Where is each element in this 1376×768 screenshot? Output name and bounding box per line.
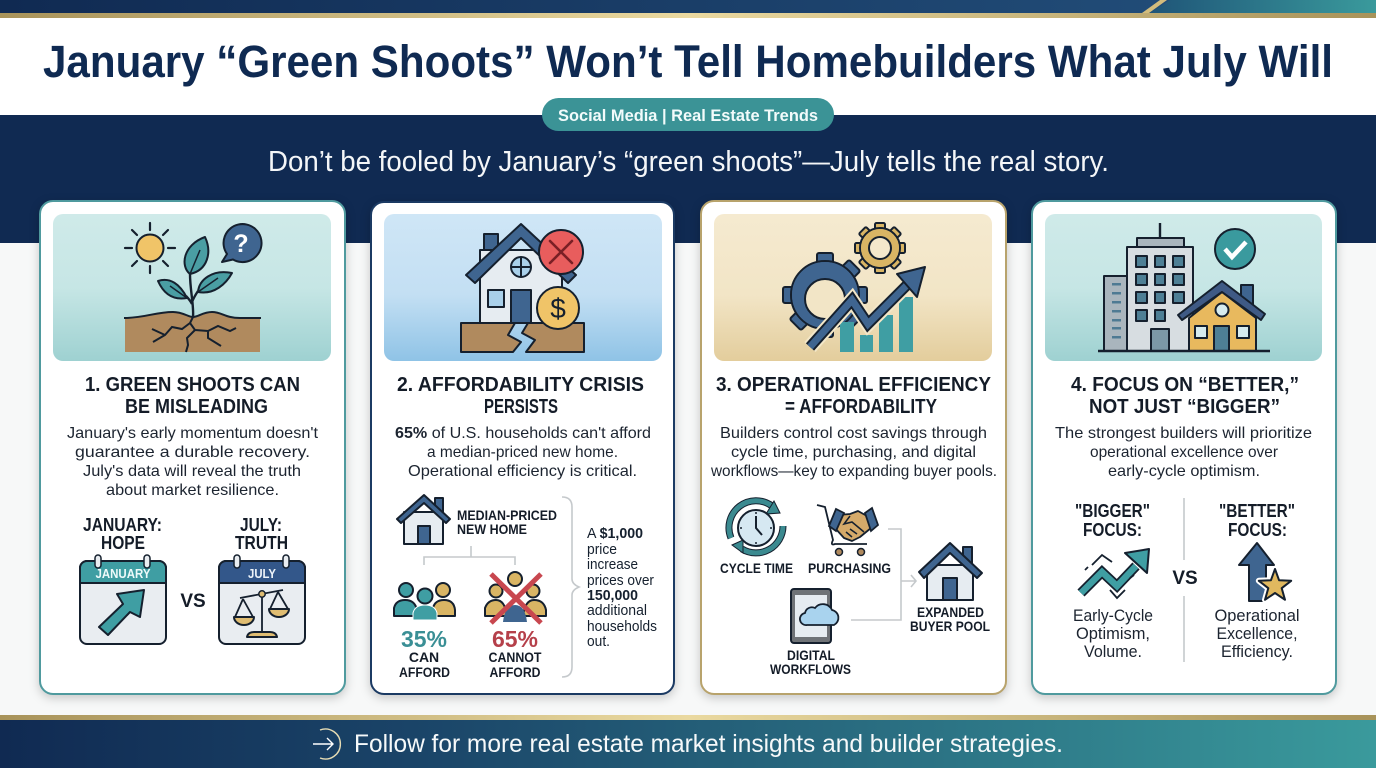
icon: july calendar with scales (219, 555, 305, 644)
panel: card 2 affordability crisis (371, 202, 674, 694)
stat: 65% cannot afford (488, 626, 542, 680)
body text (395, 425, 651, 480)
label: expanded buyer pool: BUYER POOL (910, 618, 990, 634)
label: bigger focus (1075, 501, 1150, 540)
icon: people who cannot afford (485, 572, 546, 623)
heading (716, 373, 991, 418)
label: median-priced new home: MEDIAN-PRICED (457, 507, 557, 523)
heading (1071, 373, 1299, 418)
category pill: Social Media | Real Estate Trends (558, 107, 818, 125)
label: median-priced new home: NEW HOME (457, 521, 527, 537)
callout: price increase: households (587, 619, 657, 635)
panel: card 4 better not bigger (1032, 201, 1336, 694)
label: expanded buyer pool (910, 604, 990, 634)
stat: 35% can afford: CAN (409, 649, 439, 665)
text: better focus description: Excellence, (1216, 624, 1298, 643)
callout: price increase: A $1,000 (587, 526, 643, 542)
label: better focus: FOCUS: (1228, 520, 1287, 540)
label: median-priced new home (457, 507, 557, 537)
vs label: VS (1172, 568, 1198, 589)
divider (1183, 498, 1185, 662)
heading (85, 373, 300, 418)
icon: january calendar: JANUARY (96, 567, 151, 581)
heading: = AFFORDABILITY (785, 395, 937, 418)
label: january hope: HOPE (101, 533, 145, 553)
icon: gears with rising arrow and bars (783, 223, 925, 352)
heading: BE MISLEADING (125, 395, 268, 418)
vs label: VS (180, 591, 206, 612)
callout: price increase: out. (587, 634, 610, 650)
icon: purchasing handshake and cart (817, 505, 878, 556)
icon: july calendar with scales: JULY (248, 567, 277, 581)
label: january hope: JANUARY: (83, 515, 162, 535)
label: better focus (1219, 501, 1295, 540)
heading: 1. GREEN SHOOTS CAN (85, 373, 300, 396)
label: better focus: "BETTER" (1219, 501, 1295, 521)
icon: people who can afford (394, 583, 455, 620)
stat: 35% can afford: AFFORD (399, 664, 450, 680)
heading: PERSISTS (484, 395, 558, 418)
text: bigger focus description: Optimism, (1076, 624, 1150, 643)
body text: January's early momentum doesn't (67, 425, 319, 442)
icon: sprout in cracked soil with sun and question: ? (233, 230, 249, 258)
subtitle: Don’t be fooled by January’s “green shoots”—July tells the real story. (268, 146, 1109, 178)
stat: 65% cannot afford: AFFORD (490, 664, 540, 680)
icon: cracked house with x and dollar (461, 224, 584, 352)
body text (67, 425, 319, 499)
body text (1055, 425, 1312, 480)
label: cycle time: CYCLE TIME (720, 560, 793, 576)
text: better focus description: Efficiency. (1221, 642, 1293, 661)
callout: price increase: additional (587, 603, 647, 619)
label: bigger focus: FOCUS: (1083, 520, 1142, 540)
icon: cycle time clock (729, 501, 783, 553)
brace (562, 497, 579, 677)
body text: about market resilience. (106, 482, 279, 499)
body text: The strongest builders will prioritize (1055, 425, 1312, 442)
label: digital workflows: DIGITAL (787, 647, 835, 663)
panel: card 3 operational efficiency (701, 201, 1006, 694)
callout: price increase: prices over (587, 573, 654, 589)
top banner (0, 0, 1376, 18)
body text: operational excellence over (1090, 444, 1279, 461)
heading: 4. FOCUS ON “BETTER,” (1071, 373, 1299, 396)
callout: price increase (587, 526, 657, 650)
stat: 35% can afford (399, 626, 450, 680)
stat: 35% can afford: 35% (401, 626, 447, 652)
icon: january calendar (80, 555, 166, 644)
text: bigger focus description: Volume. (1084, 642, 1142, 661)
label: expanded buyer pool: EXPANDED (917, 604, 984, 620)
heading (397, 373, 644, 418)
body text: 65% of U.S. households can't afford (395, 425, 651, 442)
text: bigger focus description (1073, 606, 1153, 661)
label: purchasing: PURCHASING (808, 560, 891, 576)
icon: zigzag growth arrow (1081, 549, 1149, 598)
label: july truth (235, 515, 288, 553)
stat: 65% cannot afford: CANNOT (488, 649, 542, 665)
icon: cracked house with x and dollar: $ (550, 293, 566, 324)
call to action: Follow for more real estate market insights and builder strategies. (354, 730, 1063, 758)
text: better focus description: Operational (1214, 606, 1300, 625)
icon: sprout in cracked soil with sun and question (124, 223, 262, 352)
callout: price increase: 150,000 (587, 588, 638, 604)
panel: card 1 green shoots (40, 201, 345, 694)
label: july truth: JULY: (240, 515, 282, 535)
heading: 2. AFFORDABILITY CRISIS (397, 373, 644, 396)
icon: follow arrow (313, 729, 340, 759)
body text: Operational efficiency is critical. (408, 463, 637, 480)
stat: 65% cannot afford: 65% (492, 626, 538, 652)
footer (0, 715, 1376, 768)
callout: price increase: price (587, 542, 617, 558)
callout: price increase: increase (587, 557, 638, 573)
category pill (542, 98, 834, 131)
label: july truth: TRUTH (235, 533, 288, 553)
label: digital workflows (770, 647, 851, 677)
label: january hope (83, 515, 162, 553)
icon: expanded buyer pool house (919, 543, 982, 600)
text: bigger focus description: Early-Cycle (1073, 606, 1153, 625)
body text: early-cycle optimism. (1108, 463, 1260, 480)
title band (0, 18, 1376, 115)
text: better focus description (1214, 606, 1300, 661)
body text: workflows—key to expanding buyer pools. (710, 463, 997, 480)
heading: NOT JUST “BIGGER” (1089, 395, 1280, 418)
label: digital workflows: WORKFLOWS (770, 661, 851, 677)
body text: cycle time, purchasing, and digital (731, 444, 976, 461)
arrow: connectors to expanded buyer pool (851, 529, 916, 620)
icon: median-priced house (397, 495, 450, 544)
connector tree (424, 546, 515, 565)
body text: Builders control cost savings through (720, 425, 987, 442)
body text (710, 425, 997, 480)
body text: a median-priced new home. (427, 444, 618, 461)
icon: up arrow with star (1239, 543, 1291, 601)
body text: guarantee a durable recovery. (75, 444, 310, 461)
navy band (0, 115, 1376, 243)
heading: 3. OPERATIONAL EFFICIENCY (716, 373, 991, 396)
label: bigger focus: "BIGGER" (1075, 501, 1150, 521)
icon: buildings, house and check (1098, 223, 1270, 351)
icon: tablet with cloud (791, 589, 838, 643)
body text: July's data will reveal the truth (83, 463, 301, 480)
